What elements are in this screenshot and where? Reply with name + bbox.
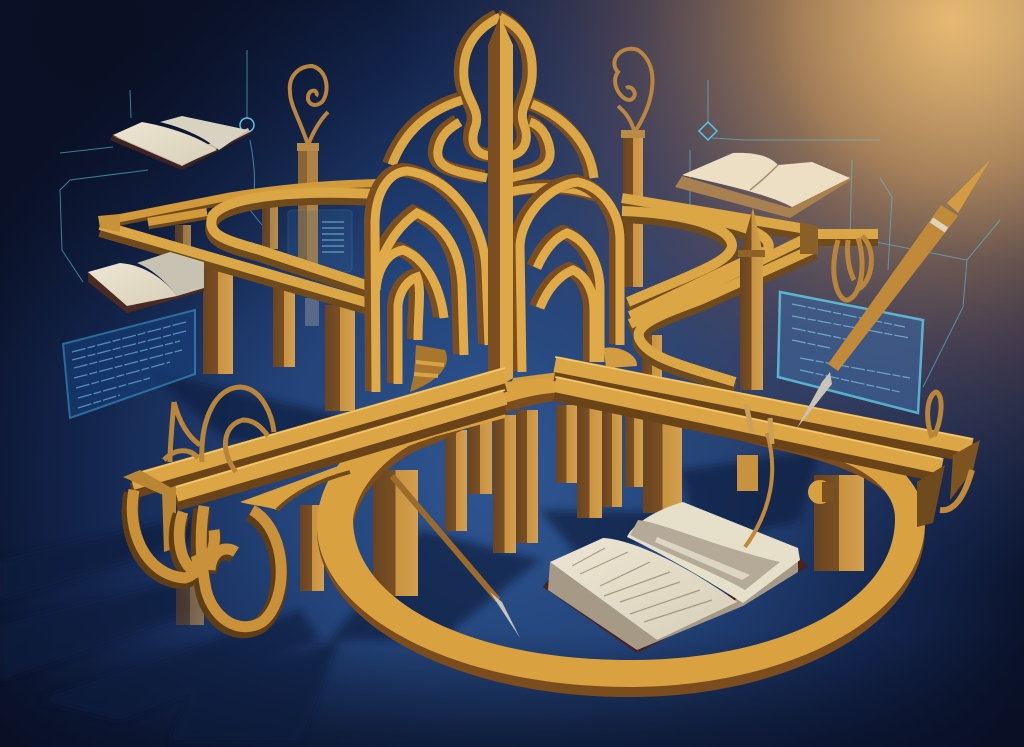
book: mid left: [88, 252, 204, 313]
floor shadows: [0, 372, 820, 740]
pen: front: [392, 476, 520, 638]
beam end caps: [123, 440, 980, 552]
icon: node rings: [240, 118, 717, 140]
left flare joining beam and ring: [240, 405, 505, 510]
front beams: [132, 357, 972, 503]
front pillars: [176, 405, 864, 625]
panel: code hologram left: [63, 310, 195, 418]
central tower: [371, 16, 620, 392]
thin flourishes: [164, 236, 941, 472]
left spire: [290, 66, 328, 326]
book: front open: [543, 502, 808, 653]
panel: faint hologram behind ring: [288, 210, 352, 272]
ring: [317, 378, 925, 697]
quill pen: right: [745, 160, 990, 547]
calligraphic curls left: [130, 490, 281, 630]
book: top right: [675, 153, 851, 218]
right spire: [614, 49, 652, 287]
panel: code hologram right: [778, 292, 923, 413]
back pillars: [175, 203, 662, 411]
tower base steps: [410, 345, 637, 392]
book: top left: [110, 116, 250, 170]
pencil tower right: [737, 208, 765, 491]
upper beams: [98, 183, 878, 388]
circuit lines: [60, 50, 1000, 387]
small knob: [808, 480, 834, 504]
